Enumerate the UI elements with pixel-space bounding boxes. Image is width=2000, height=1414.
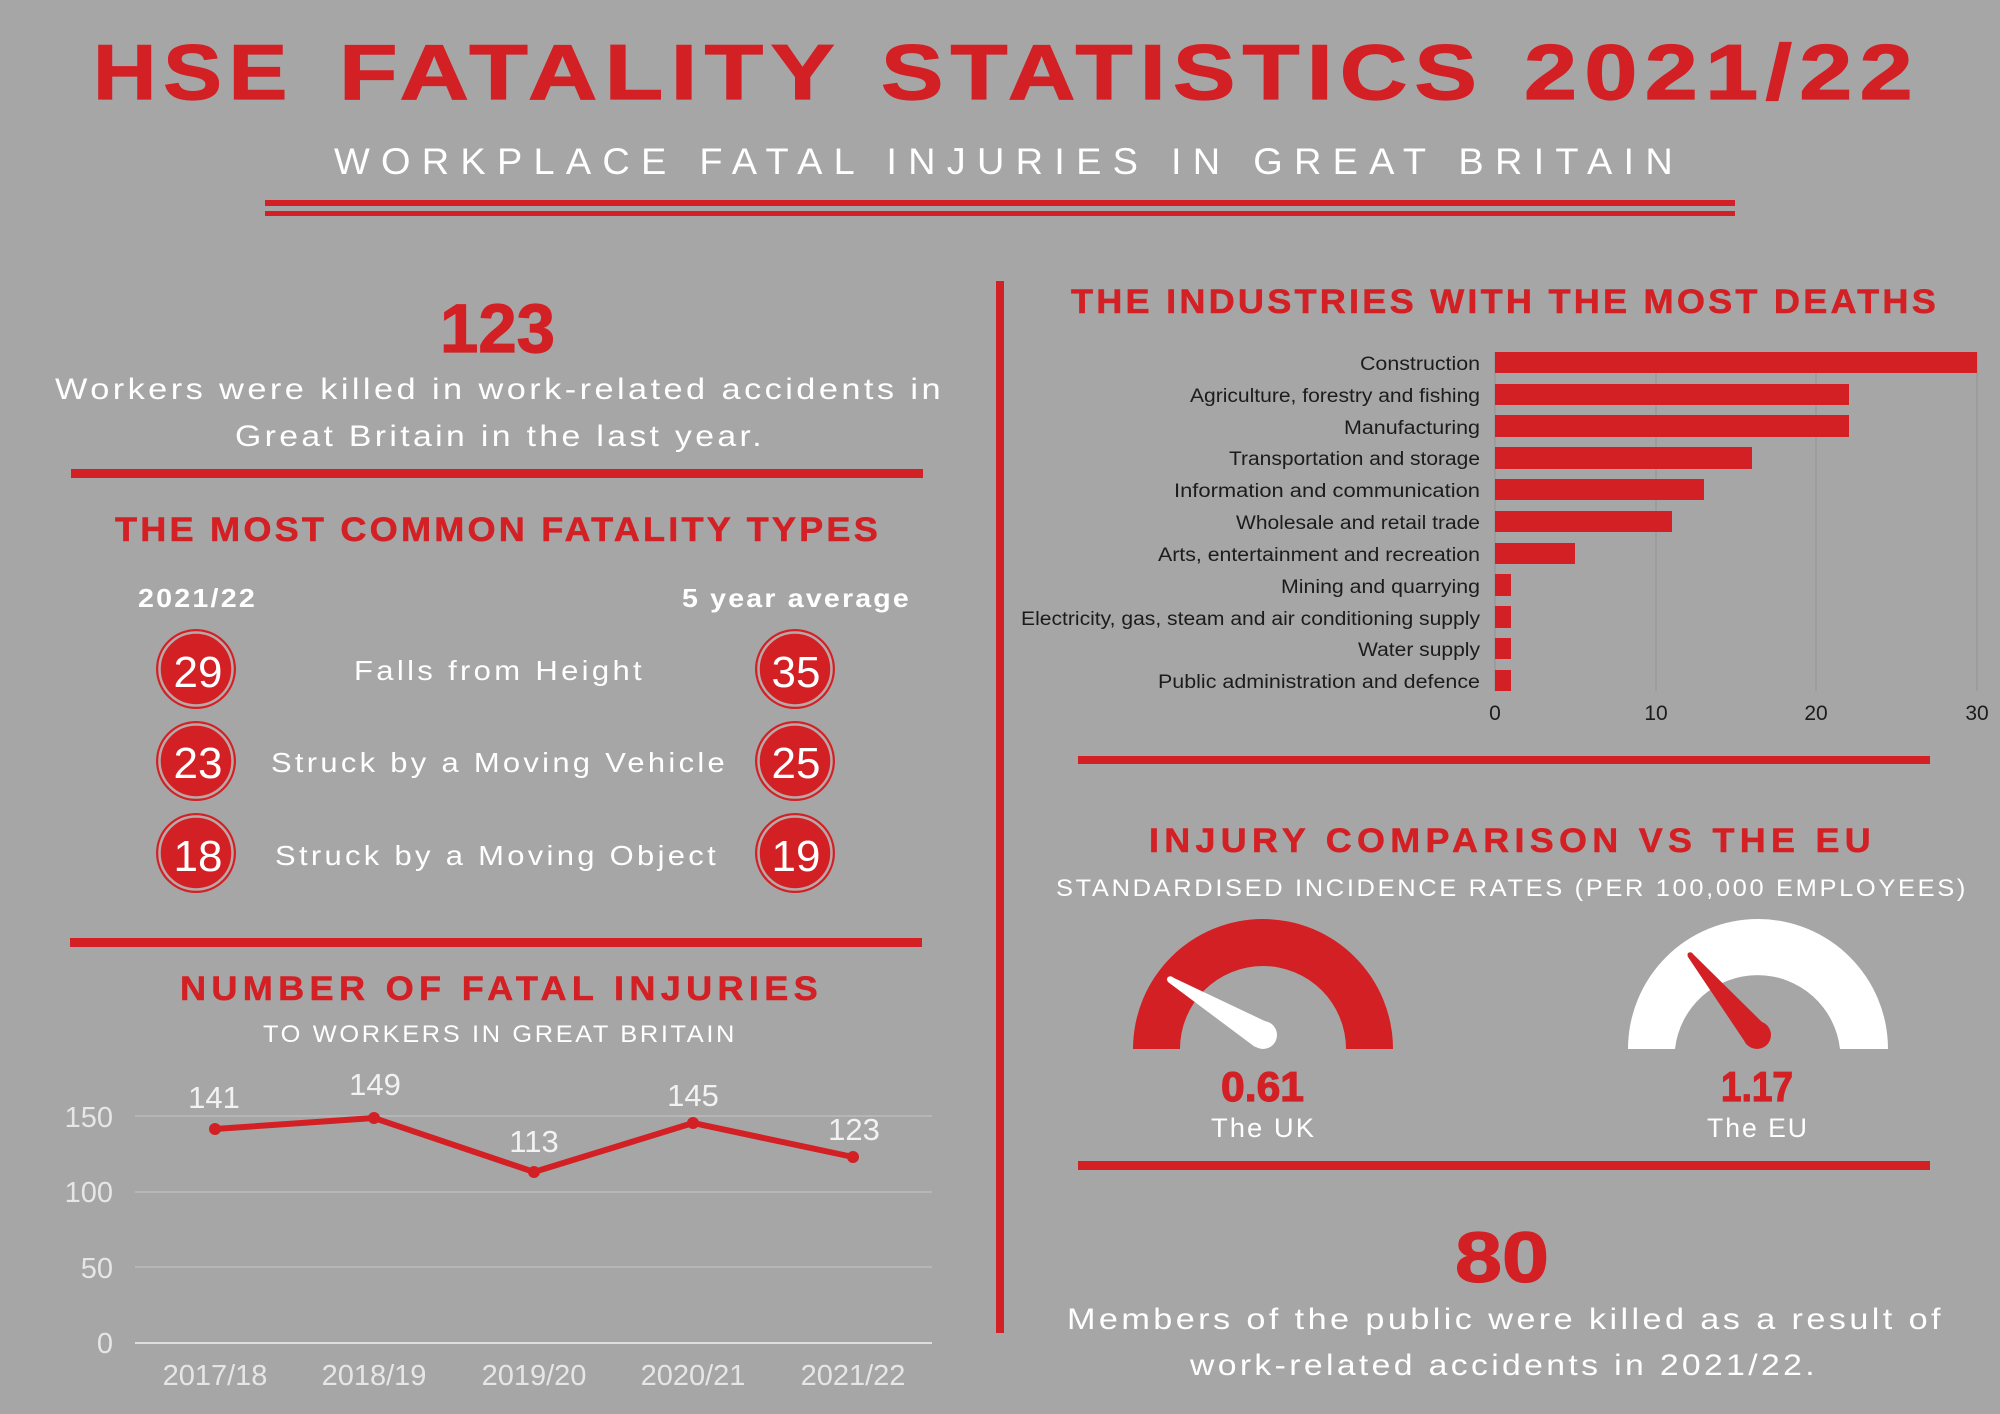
badge: 25 [755,721,835,801]
title: STATISTICS [881,28,1484,116]
title [93,28,1920,116]
label: struck by a moving vehicle: Struck by a Moving Vehicle [271,747,728,778]
header [93,28,1920,216]
bar chart: 20 [1804,702,1828,725]
line chart: 149 [349,1067,401,1102]
column heading: 5 year average: 5 year average [682,583,911,613]
panel: workers killed [55,290,944,453]
badge: 25: 25 [772,739,820,788]
badge: 29 [156,629,236,709]
subheading: standardised incidence rates: STANDARDISED INCIDENCE RATES (PER 100,000 EMPLOYEES) [1056,875,1968,902]
label: The EU: The EU [1707,1113,1809,1143]
heading: injury comparison: INJURY COMPARISON VS THE EU [1149,822,1876,860]
bar chart: Agriculture, forestry and fishing [1190,386,1480,407]
heading: fatality types: THE MOST COMMON FATALITY TYPES [115,511,881,549]
line chart: 141 [188,1080,240,1115]
line chart: 0 [97,1328,113,1360]
bar chart: Public administration and defence [1158,672,1480,693]
workers description: Great Britain in the last year. [235,420,765,453]
bar chart: Wholesale and retail trade [1236,513,1480,534]
public description: Members of the public were killed as a result of [1067,1303,1944,1336]
badge: 18 [156,813,236,893]
label: falls from height: Falls from Height [354,655,645,686]
line chart: 113 [509,1124,559,1159]
value: UK: 0.61 [1221,1063,1304,1110]
badge: 23: 23 [174,739,222,788]
big number 80: 80 [1455,1219,1549,1298]
title: HSE [93,28,294,116]
badge: 35: 35 [772,648,820,697]
vertical divider [996,281,1004,1333]
bar chart: Manufacturing [1344,418,1480,439]
big number 123: 123 [440,290,555,367]
title: FATALITY [339,28,842,116]
bar chart: 30 [1965,702,1989,725]
line chart: 2020/21 [641,1360,745,1392]
workers description [55,373,944,453]
panel: industries with the most deaths [1021,283,1989,725]
bar chart: Water supply [1358,640,1481,661]
line chart: 150 [65,1102,113,1134]
workers description: Workers were killed in work-related accidents in [55,373,944,406]
badge: 18: 18 [174,832,222,881]
line chart [65,1067,932,1392]
bar chart: Electricity, gas, steam and air conditioning supply [1021,609,1481,630]
line chart: 100 [65,1177,113,1209]
badge: 19: 19 [772,832,820,881]
bar chart: Mining and quarrying [1281,577,1480,598]
bar chart: Construction [1360,354,1480,375]
value: EU: 1.17 [1721,1063,1793,1110]
panel: injury comparison vs the EU [1056,822,1968,1143]
heading: industries: THE INDUSTRIES WITH THE MOST DEATHS [1071,283,1939,321]
line chart: 123 [828,1112,880,1147]
bar chart: Arts, entertainment and recreation [1158,545,1480,566]
line chart: 2019/20 [482,1360,586,1392]
panel: number of fatal injuries [65,970,932,1392]
heading: number of fatal injuries: NUMBER OF FATAL INJURIES [180,970,823,1008]
public description [1067,1303,1944,1382]
badge: 29: 29 [174,648,222,697]
line chart: 2017/18 [163,1360,267,1392]
line chart: 2018/19 [322,1360,426,1392]
gauge: EU [1628,919,1888,1049]
bar chart: Information and communication [1174,481,1480,502]
line chart: 50 [81,1253,113,1285]
bar chart: 0 [1489,702,1501,725]
label: struck by a moving object: Struck by a Moving Object [275,840,719,871]
label: The UK: The UK [1211,1113,1316,1143]
panel: most common fatality types [115,511,911,893]
public description: work-related accidents in 2021/22. [1189,1349,1818,1382]
bar chart [1021,352,1989,725]
panel: members of the public [1067,1219,1944,1382]
header double rule [265,200,1735,216]
badge: 35 [755,629,835,709]
badge: 19 [755,813,835,893]
bar chart: Transportation and storage [1229,449,1480,470]
line chart: 2021/22 [801,1360,905,1392]
column heading: 2021/22: 2021/22 [138,583,257,613]
bar chart: 10 [1644,702,1668,725]
title: 2021/22 [1524,28,1920,116]
badge: 23 [156,721,236,801]
subtitle: WORKPLACE FATAL INJURIES IN GREAT BRITAIN [334,141,1684,182]
gauge: UK [1133,919,1393,1049]
line chart: 145 [667,1078,719,1113]
subheading: to workers: TO WORKERS IN GREAT BRITAIN [263,1021,737,1048]
